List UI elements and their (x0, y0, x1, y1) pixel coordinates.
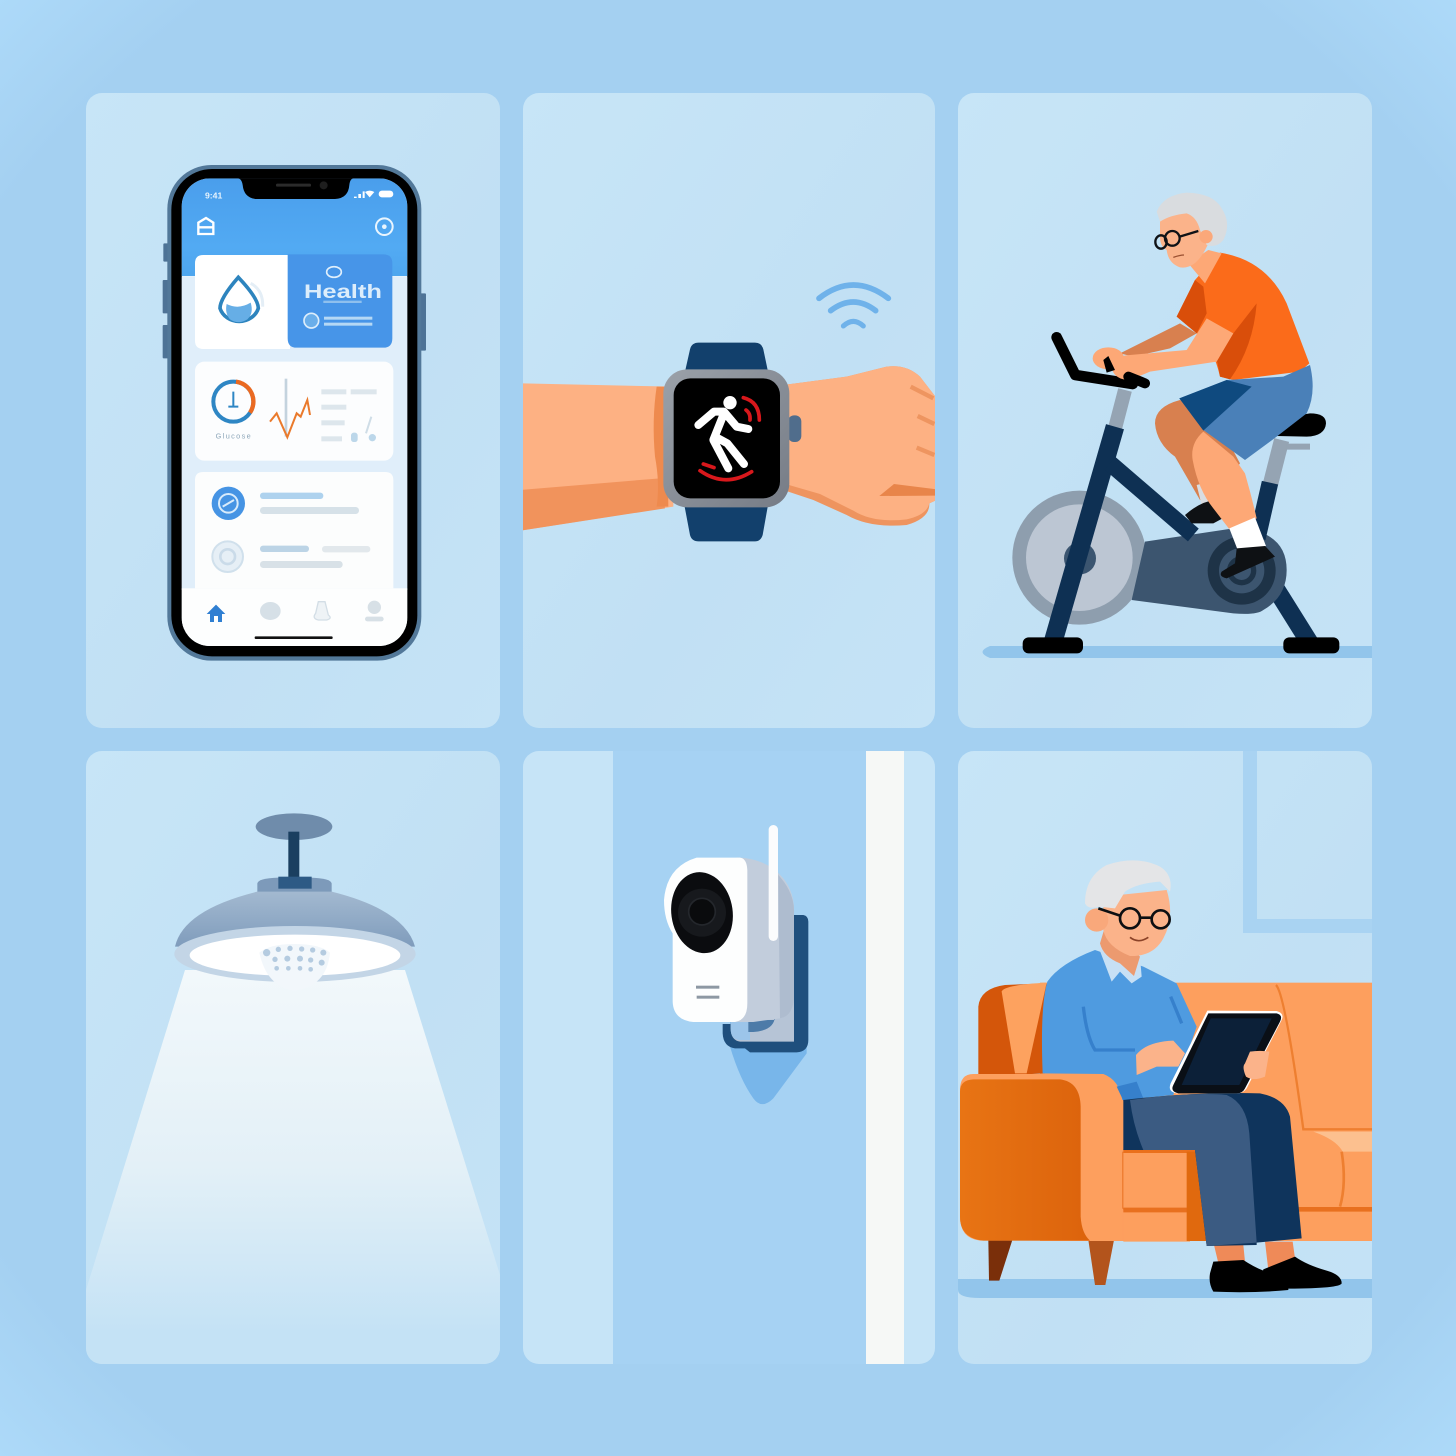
security camera (664, 825, 808, 1104)
sofa (960, 983, 1377, 1285)
panel: senior on sofa with tablet (958, 751, 1377, 1364)
metrics card (195, 362, 393, 461)
app header icons (198, 218, 213, 234)
near arm (1112, 318, 1233, 380)
shirt (1177, 253, 1309, 380)
head (1160, 210, 1208, 268)
legs (1123, 1093, 1302, 1246)
hand (783, 366, 937, 526)
sensor dome (259, 944, 330, 991)
panel: health phone app (86, 93, 500, 728)
fall icon (698, 396, 759, 480)
panel: ceiling light sensor (86, 751, 500, 1364)
floor (982, 646, 1372, 658)
neck (1188, 250, 1222, 283)
door frame (866, 751, 904, 1364)
panel: wall camera (523, 751, 935, 1364)
icon: wifi signal (819, 285, 888, 326)
health card (195, 254, 392, 349)
tablet (1170, 1011, 1283, 1093)
activity list card (195, 472, 393, 588)
wall picture frame (1243, 751, 1372, 933)
near leg (1192, 432, 1257, 530)
senior reader (1042, 860, 1342, 1292)
watch strap (684, 343, 768, 541)
shins and shoes (1214, 1242, 1295, 1270)
health card: Health (304, 282, 382, 303)
bottom navigation (207, 601, 384, 639)
hands (1136, 1041, 1185, 1075)
phone (163, 165, 426, 661)
light beam (86, 970, 500, 1364)
collar and head (1100, 952, 1142, 984)
panel: senior on exercise bike (958, 93, 1372, 728)
wall recess (613, 751, 866, 1364)
status bar: 9:41 (205, 191, 223, 201)
wrist and watch (520, 285, 937, 541)
metrics card: Glucose (216, 432, 251, 441)
far arm (1120, 323, 1197, 357)
panel: smartwatch fall detection (520, 93, 937, 728)
far leg (1155, 400, 1240, 500)
senior rider (1093, 193, 1313, 578)
ceiling lamp (174, 813, 416, 991)
sweater (1042, 950, 1197, 1100)
notch (237, 178, 354, 199)
floor (958, 1279, 1372, 1298)
arm (520, 383, 673, 531)
exercise bike (1012, 337, 1339, 653)
shorts (1179, 365, 1313, 460)
